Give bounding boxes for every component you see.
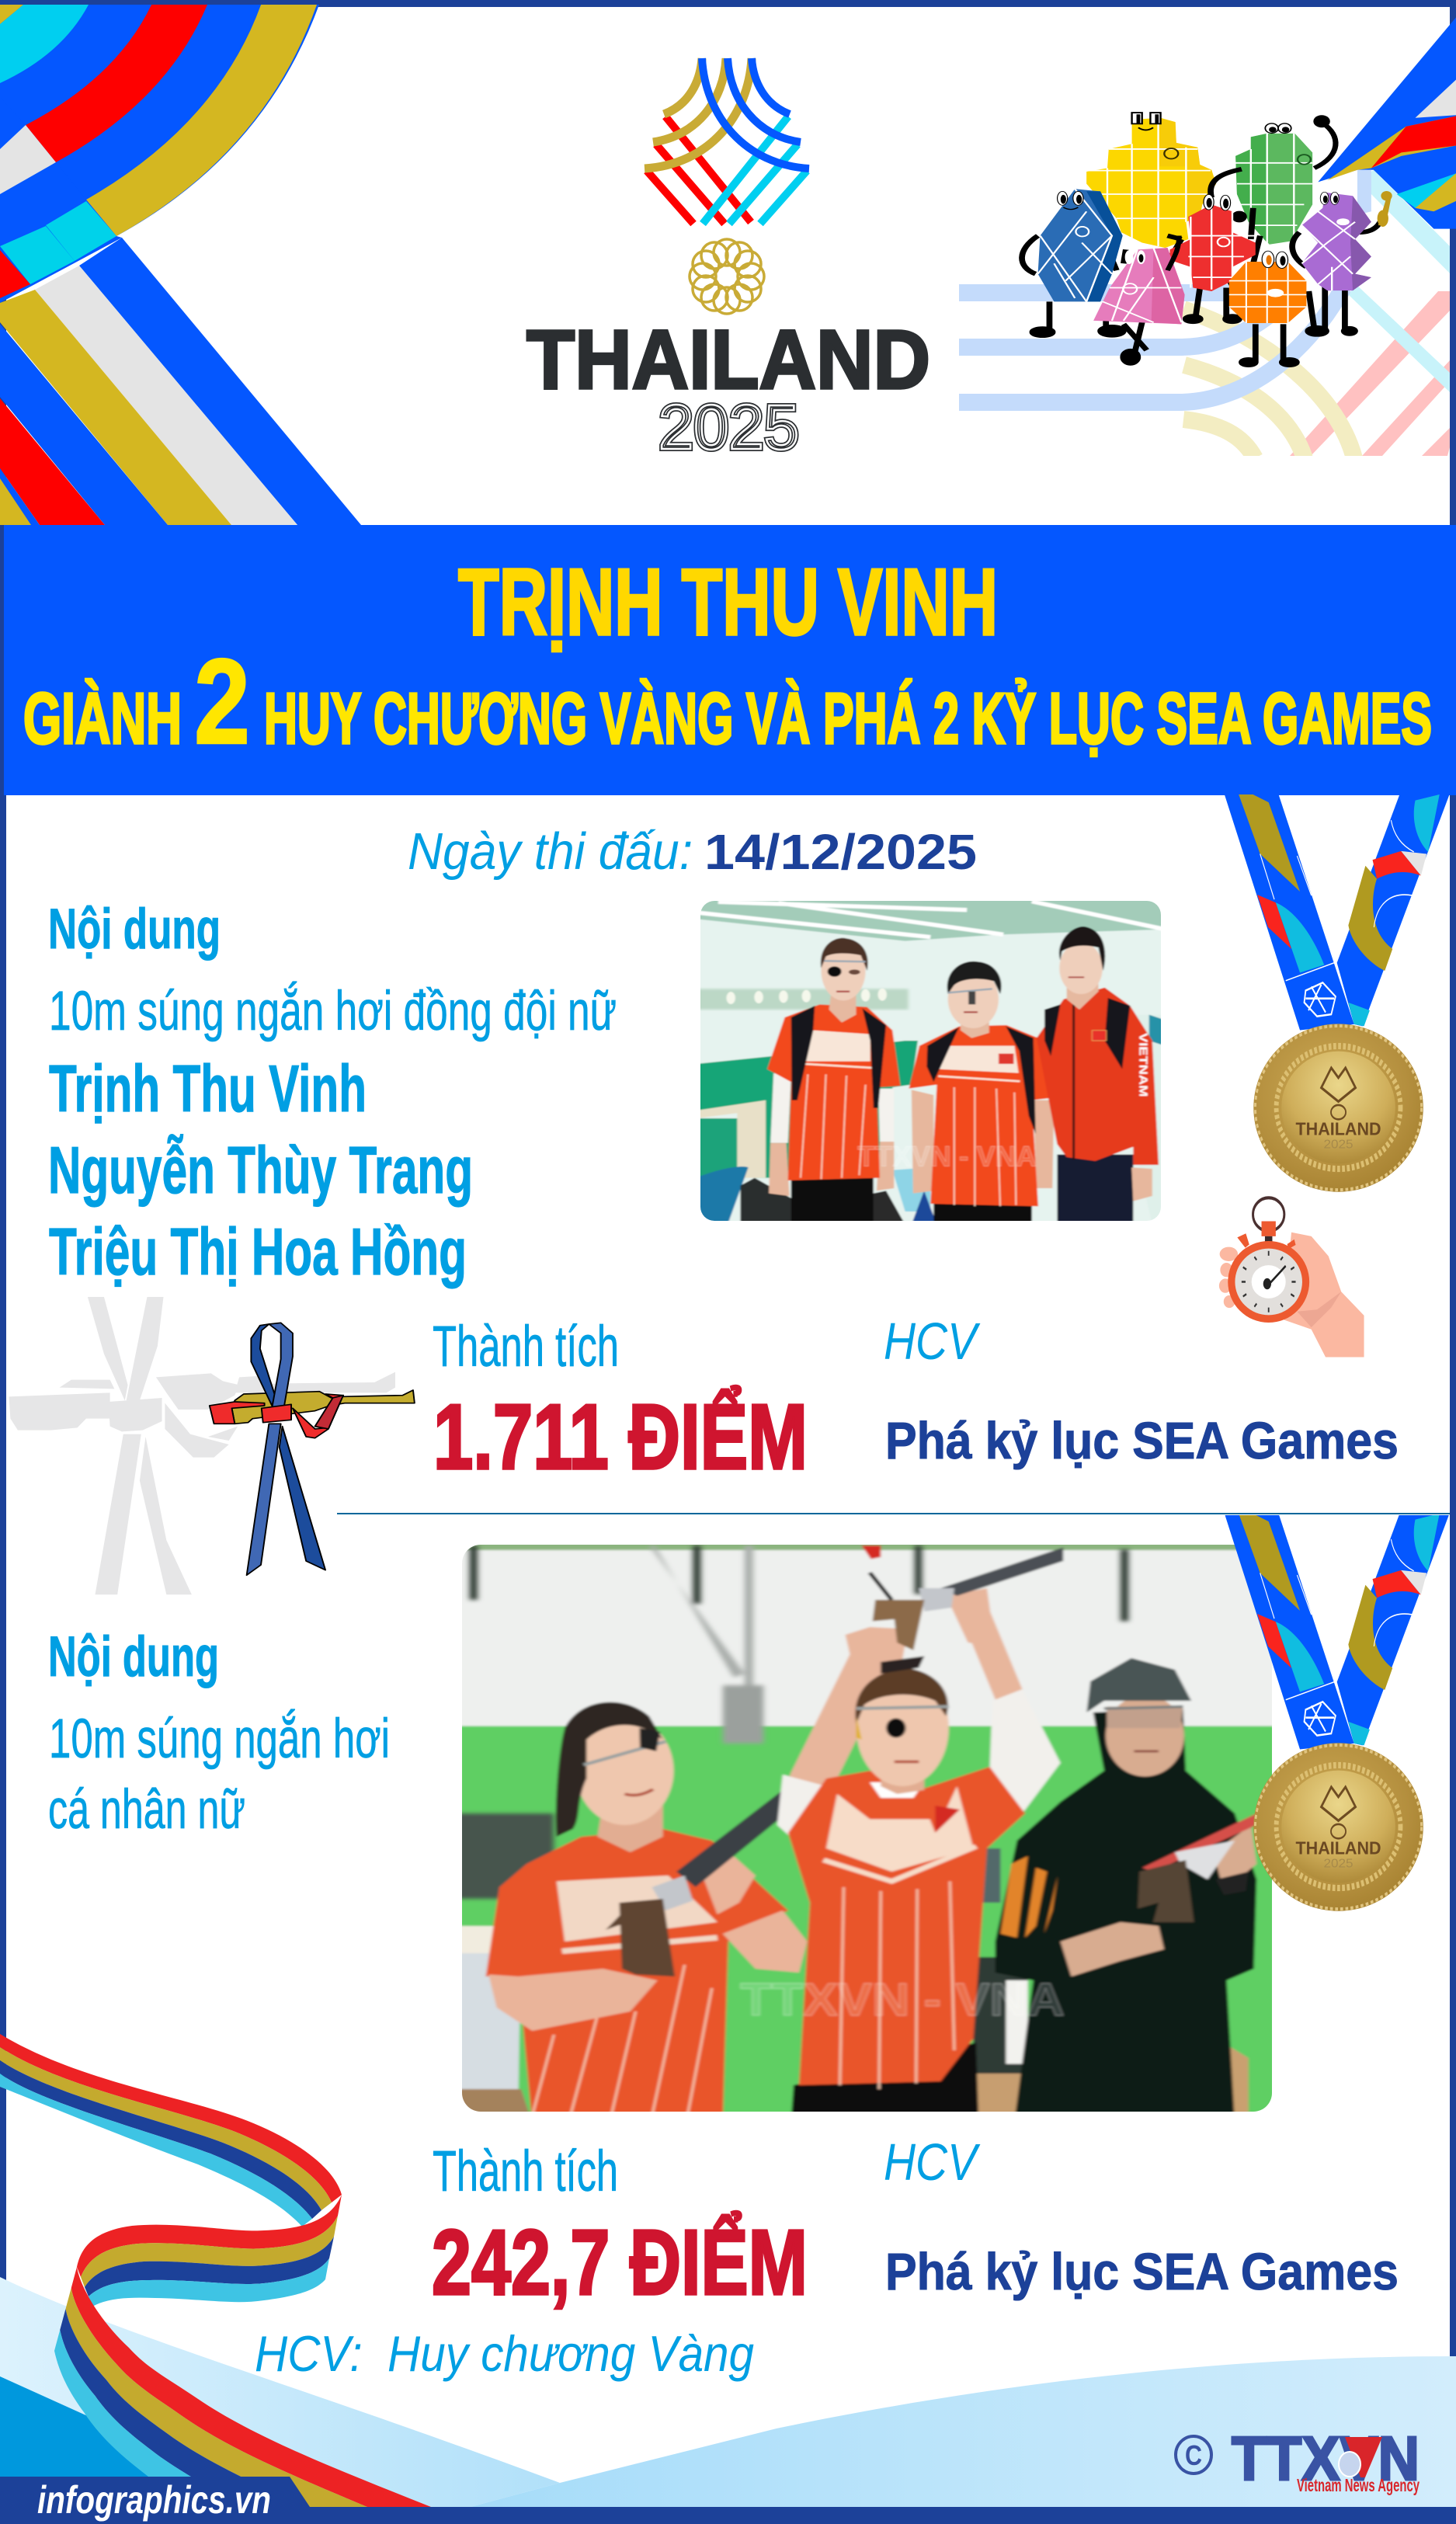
photo watermark: TTXVN - VNA — [740, 1974, 1065, 2025]
left shooter — [486, 1702, 807, 2122]
heading: Nội dung — [48, 1625, 219, 1688]
mascots group — [1022, 113, 1392, 365]
result block one — [433, 1312, 1399, 1489]
banner background — [4, 525, 1456, 795]
medal one — [1225, 794, 1450, 1192]
agency wordmark: TTXVN — [1232, 2424, 1420, 2493]
result label: Thành tích — [433, 1314, 619, 1378]
team event description — [48, 898, 617, 1289]
date label: Ngày thi đấu: — [408, 822, 693, 881]
mascot: pink — [1093, 236, 1185, 324]
mascot: orange — [1229, 251, 1306, 323]
subtitle: big number: 2 — [194, 634, 250, 770]
header: top-right ribbon pattern — [1318, 17, 1456, 229]
abbreviation legend: HCV: Huy chương Vàng — [255, 2325, 754, 2382]
red V accent — [1345, 2437, 1382, 2477]
photo background — [456, 1542, 1278, 2122]
heading: Nội dung — [48, 898, 221, 961]
record note: Phá kỷ lục SEA Games — [885, 1412, 1399, 1470]
event name line 2: cá nhân nữ — [48, 1779, 245, 1841]
medal label: HCV — [884, 2133, 980, 2192]
mascot: purple — [1301, 191, 1392, 290]
medal year: 2025 — [1323, 1857, 1353, 1870]
medal wordmark: THAILAND — [1296, 1120, 1381, 1139]
individual event description — [48, 1625, 390, 1841]
2025 wordmark: 2025 — [659, 392, 799, 463]
header: pale stripes behind mascots — [959, 170, 1450, 458]
header: top-left ribbon pattern — [0, 0, 361, 525]
sleeve lettering: VIETNAM — [1137, 1033, 1150, 1097]
woman one — [767, 938, 900, 1225]
mascot: yellow — [1086, 113, 1216, 248]
medal disc — [1253, 1743, 1423, 1911]
ribbon middle fold — [77, 2195, 342, 2307]
mascot: green — [1235, 115, 1336, 245]
medal year: 2025 — [1323, 1138, 1353, 1151]
ribbon back fold — [0, 2034, 342, 2227]
section divider — [337, 1513, 1450, 1514]
result label: Thành tích — [433, 2139, 618, 2203]
medal wordmark: THAILAND — [1296, 1839, 1381, 1858]
icon: stopwatch in hand — [1219, 1198, 1364, 1357]
footer wave: light left — [0, 2277, 560, 2507]
logo flower — [690, 239, 764, 314]
footer wave: light right — [471, 2356, 1456, 2507]
title: athlete name: TRỊNH THU VINH — [458, 549, 998, 655]
photo watermark: TTXVN - VNA — [857, 1140, 1037, 1173]
date value: 14/12/2025 — [704, 824, 977, 880]
Thailand 2025 logo — [526, 58, 930, 463]
icon: rifle and ribbon watermark — [9, 1297, 395, 1594]
centre shooter — [777, 1545, 1063, 2122]
TTXVN agency logo — [1176, 2424, 1420, 2495]
record note: Phá kỷ lục SEA Games — [885, 2243, 1399, 2301]
mascot: blue — [1038, 189, 1123, 301]
mascot: red — [1169, 194, 1256, 291]
footer site name: infographics.vn — [37, 2478, 271, 2522]
right shooter — [996, 1658, 1256, 2122]
arc bands — [0, 0, 319, 303]
2025 wordmark: 2025 — [659, 392, 799, 463]
footer bar — [0, 2477, 1456, 2524]
woman two — [909, 961, 1055, 1225]
photo: podium with three shooters — [456, 1542, 1278, 2122]
lanyard — [1225, 794, 1450, 1031]
score: 242,7 ĐIỂM — [432, 2211, 808, 2314]
ribbon front fold — [54, 2267, 431, 2524]
medal disc — [1253, 1024, 1423, 1192]
event name: 10m súng ngắn hơi đồng đội nữ — [49, 981, 617, 1042]
icon: rifle tied with ribbon — [210, 1323, 415, 1575]
score: 1.711 ĐIỂM — [433, 1385, 808, 1489]
diagonal bands — [0, 238, 361, 525]
match date — [408, 822, 977, 881]
athlete 3: Triệu Thị Hoa Hồng — [49, 1215, 467, 1289]
copyright mark — [1176, 2436, 1211, 2474]
photo background — [696, 899, 1165, 1225]
title banner — [4, 525, 1456, 795]
photo: team of three athletes — [696, 899, 1165, 1225]
result block two — [255, 2133, 1399, 2382]
athlete 2: Nguyễn Thùy Trang — [48, 1134, 473, 1208]
medal label: HCV — [884, 1312, 980, 1371]
event name line 1: 10m súng ngắn hơi — [49, 1709, 390, 1770]
woman three — [1037, 927, 1159, 1225]
subtitle: part 1: GIÀNH — [23, 678, 182, 759]
THAILAND wordmark: THAILAND — [526, 312, 930, 406]
copyright mark: C — [1185, 2439, 1202, 2471]
lanyard — [1225, 1514, 1450, 1750]
medal two — [1225, 1514, 1450, 1911]
globe accent — [1339, 2452, 1360, 2477]
decorative tricolour ribbon — [0, 2034, 431, 2524]
footer wave: dark left — [0, 2376, 155, 2477]
athlete 1: Trịnh Thu Vinh — [49, 1052, 367, 1126]
logo emblem — [645, 58, 809, 224]
mascot legs — [1022, 169, 1383, 365]
